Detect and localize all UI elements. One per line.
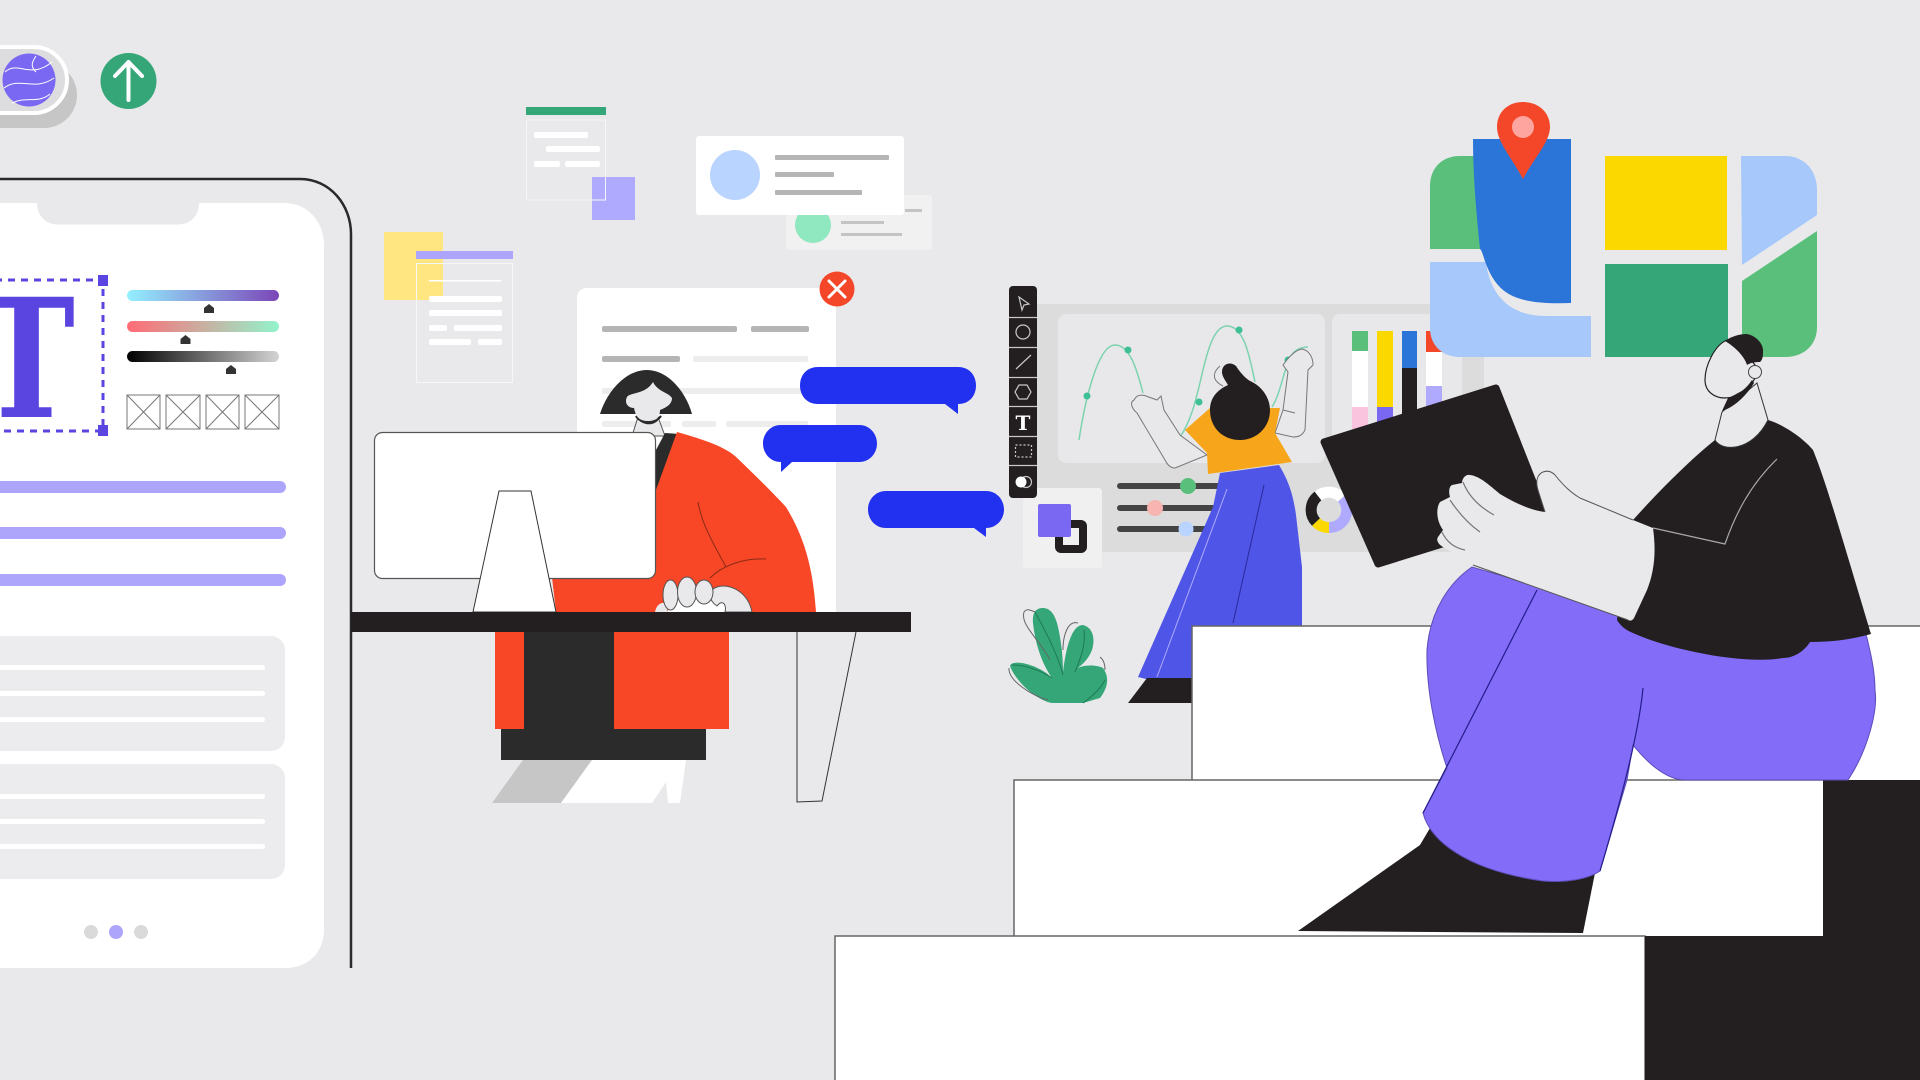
man on stairs (1298, 334, 1876, 933)
tool icons (1015, 297, 1032, 488)
purple text lines (0, 481, 286, 586)
location pin (1497, 102, 1550, 179)
bezier curve (1079, 326, 1308, 440)
red sweater (550, 432, 816, 612)
shoe (1298, 828, 1595, 933)
map icon (1430, 102, 1817, 357)
hand and forearm (1437, 471, 1655, 621)
grey content cards (0, 636, 285, 879)
chat bubble 1 (800, 367, 976, 414)
shape tool card (1023, 488, 1102, 568)
tablet (1324, 388, 1545, 564)
phone mockup (0, 179, 351, 968)
chat bubble 2 (763, 425, 877, 472)
skirt (1138, 465, 1302, 690)
desktop monitor (374, 432, 656, 612)
large document behind woman (577, 288, 836, 612)
head and neck (600, 370, 692, 436)
orange top (1185, 408, 1292, 474)
upload arrow button (100, 53, 156, 109)
stairs (835, 626, 1920, 1080)
editor panel (1030, 304, 1484, 552)
donut chart (1311, 492, 1347, 528)
close icon (820, 272, 854, 306)
desk (351, 612, 911, 802)
toolbar (1009, 286, 1037, 498)
colour gradient sliders (127, 290, 279, 374)
arms (1132, 349, 1313, 468)
neck (1715, 383, 1768, 447)
shoe (1128, 678, 1200, 703)
black t-shirt (1617, 420, 1871, 660)
chat bubble 3 (868, 491, 1004, 537)
sticky note and purple document (384, 232, 513, 382)
hand on desk (655, 577, 752, 612)
property sliders (1117, 478, 1227, 536)
plant (1009, 608, 1107, 703)
profile card front (696, 136, 904, 215)
lower body and chair (492, 632, 729, 803)
globe toggle pill (0, 47, 77, 128)
colour swatches (1352, 331, 1442, 429)
tool icons: T (1016, 411, 1031, 435)
purple trousers (1423, 567, 1876, 881)
woman at screen (1128, 349, 1313, 703)
floating document green (526, 107, 635, 220)
head (1705, 334, 1763, 411)
image placeholders (127, 395, 279, 429)
hair and face (1210, 364, 1270, 440)
profile card back (786, 195, 932, 250)
woman at desk (492, 370, 816, 803)
pagination dots (84, 925, 148, 939)
